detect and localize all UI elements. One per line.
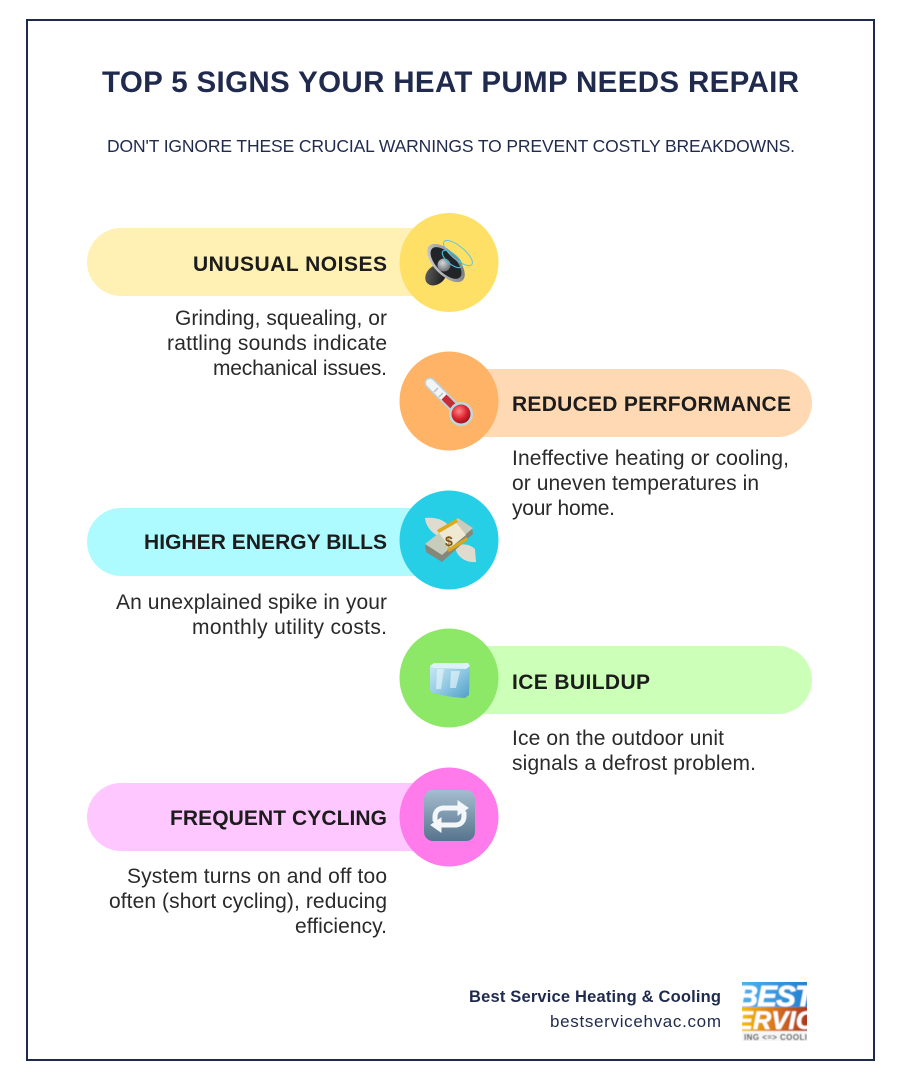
icon circle: ice buildup bbox=[400, 628, 498, 728]
description: frequent cycling: System turns on and off too bbox=[127, 865, 387, 888]
icon: repeat arrows bbox=[424, 790, 475, 841]
description: unusual noises: rattling sounds indicate bbox=[167, 332, 387, 355]
description: reduced performance bbox=[512, 447, 789, 520]
icon: ice cube bbox=[430, 663, 470, 698]
heading pill: reduced performance bbox=[452, 369, 812, 437]
description: higher energy bills: monthly utility costs. bbox=[192, 616, 387, 639]
description: ice buildup bbox=[512, 727, 756, 775]
footer: website: bestservicehvac.com bbox=[550, 1012, 721, 1031]
description: reduced performance: your home. bbox=[512, 497, 615, 520]
title: TOP 5 SIGNS YOUR HEAT PUMP NEEDS REPAIR bbox=[102, 66, 799, 99]
description: higher energy bills: An unexplained spike in your bbox=[116, 591, 387, 614]
logo: BEST bbox=[737, 981, 815, 1013]
panel: reduced performance bbox=[400, 352, 812, 520]
panel: higher energy bills bbox=[87, 490, 498, 639]
description: higher energy bills bbox=[116, 591, 387, 639]
footer: company name: Best Service Heating & Cooling bbox=[469, 988, 721, 1006]
heading pill: ice buildup bbox=[452, 646, 812, 714]
description: unusual noises bbox=[167, 307, 387, 380]
icon: thermometer bbox=[430, 383, 473, 426]
description: unusual noises: mechanical issues. bbox=[213, 357, 387, 380]
logo: ERVIC bbox=[736, 1007, 815, 1035]
description: ice buildup: Ice on the outdoor unit bbox=[512, 727, 724, 750]
description: ice buildup: signals a defrost problem. bbox=[512, 752, 756, 775]
heading: frequent cycling: FREQUENT CYCLING bbox=[170, 807, 387, 830]
heading: reduced performance: REDUCED PERFORMANCE bbox=[512, 393, 791, 416]
panel: ice buildup bbox=[400, 628, 812, 775]
description: frequent cycling: often (short cycling), reducing bbox=[109, 890, 387, 913]
description: reduced performance: or uneven temperatures in bbox=[512, 472, 759, 495]
subtitle: DON'T IGNORE THESE CRUCIAL WARNINGS TO PREVENT COSTLY BREAKDOWNS. bbox=[107, 136, 795, 156]
panel: unusual noises bbox=[87, 213, 498, 380]
heading: higher energy bills: HIGHER ENERGY BILLS bbox=[144, 531, 387, 554]
icon: money with wings: $ bbox=[445, 533, 453, 549]
logo: ING <=> COOLI bbox=[744, 1033, 807, 1042]
description: unusual noises: Grinding, squealing, or bbox=[175, 307, 387, 330]
heading: ice buildup: ICE BUILDUP bbox=[512, 671, 650, 694]
heading pill: unusual noises bbox=[87, 228, 447, 296]
icon circle: unusual noises bbox=[400, 213, 498, 312]
icon: money with wings bbox=[425, 518, 476, 562]
description: reduced performance: Ineffective heating or cooling, bbox=[512, 447, 789, 470]
icon circle: reduced performance bbox=[400, 352, 498, 450]
heading: unusual noises: UNUSUAL NOISES bbox=[193, 253, 387, 276]
description: frequent cycling bbox=[109, 865, 387, 938]
icon circle: higher energy bills bbox=[400, 490, 498, 590]
icon circle: frequent cycling bbox=[400, 768, 498, 866]
logo bbox=[742, 982, 807, 1041]
icon: speaker bbox=[421, 236, 476, 290]
description: frequent cycling: efficiency. bbox=[295, 915, 387, 938]
panel: frequent cycling bbox=[87, 768, 498, 938]
heading pill: frequent cycling bbox=[87, 783, 447, 851]
heading pill: higher energy bills bbox=[87, 508, 447, 576]
